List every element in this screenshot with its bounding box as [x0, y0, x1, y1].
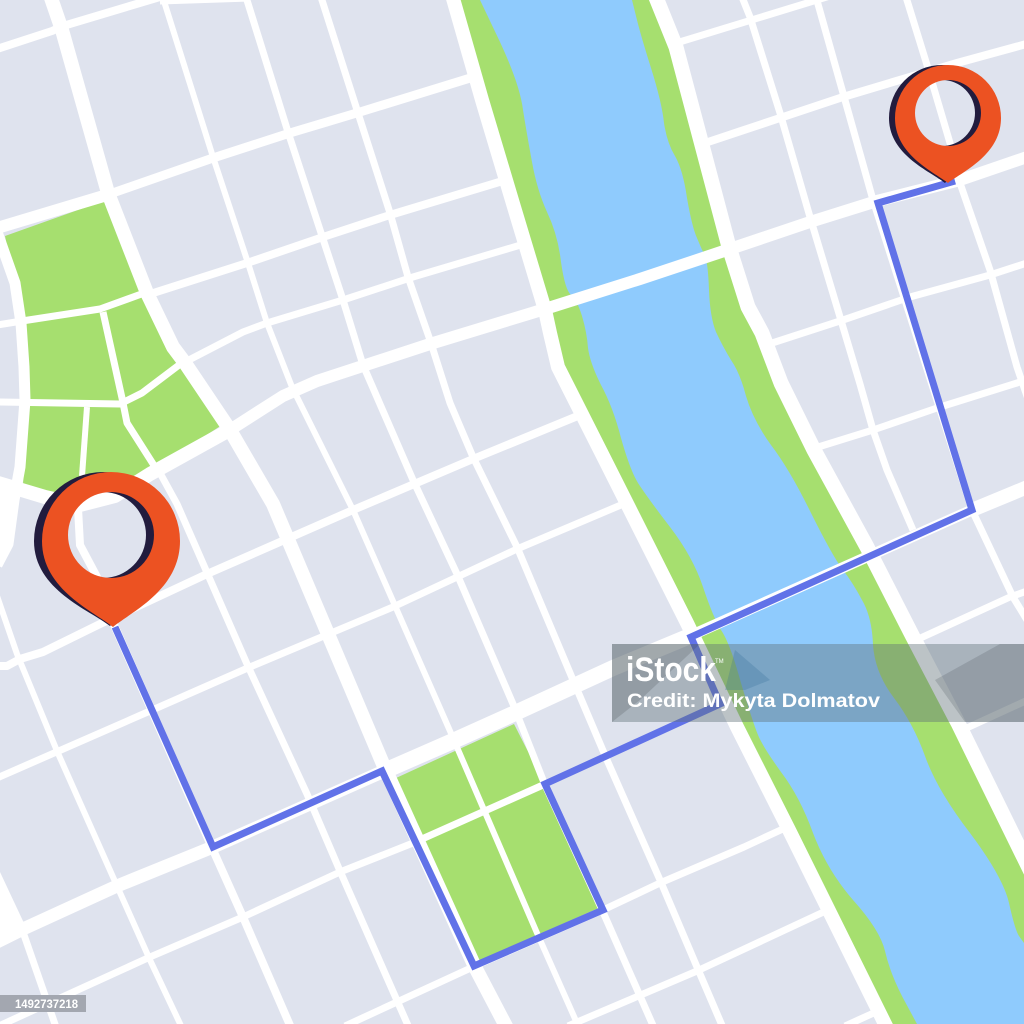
watermark credit: Credit: Mykyta Dolmatov	[627, 691, 880, 712]
trademark sign: TM	[715, 659, 724, 665]
streets east of the river	[673, 0, 830, 44]
image id tag	[0, 995, 86, 1012]
road junction fills at the left edge	[0, 484, 28, 945]
stock watermark banner	[612, 644, 1024, 722]
location pin: destination	[889, 65, 1001, 183]
navigation route line	[115, 181, 972, 966]
river	[480, 0, 1024, 1024]
park: south green blocks	[396, 724, 603, 967]
riverside green banks	[453, 0, 1024, 1024]
park: north-west green blocks	[5, 200, 222, 502]
watermark logo: iStock	[626, 651, 716, 689]
image id tag: 1492737218	[15, 997, 78, 1011]
location pin: start	[34, 472, 180, 627]
streets running north-west to south-east	[163, 0, 580, 1024]
left curved road	[0, 232, 25, 565]
